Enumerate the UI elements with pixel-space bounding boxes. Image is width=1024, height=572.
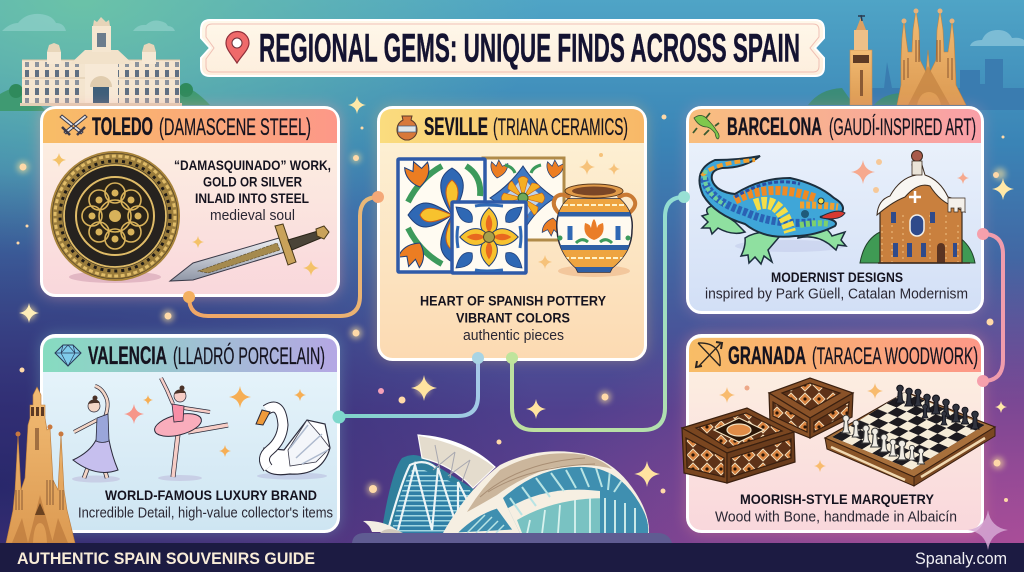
- illustration: ballerina in lilac: [72, 386, 120, 482]
- text: Toledo description: [174, 157, 331, 224]
- text: Toledo description: GOLD OR SILVER: [203, 174, 302, 190]
- illustration: white swan: [256, 407, 330, 480]
- connector: Valencia to Seville: [332, 352, 484, 424]
- text: Seville description: VIBRANT COLORS: [456, 310, 570, 326]
- heading: Seville: [424, 113, 628, 141]
- illustration: ceramic vase: [550, 184, 640, 277]
- text: Seville description: authentic pieces: [463, 328, 564, 344]
- icon: crossed swords: [60, 115, 87, 135]
- icon: bow and arrow: [696, 342, 722, 367]
- text: Toledo description: “DAMASQUINADO” WORK,: [174, 157, 331, 173]
- text: Toledo description: medieval soul: [210, 208, 295, 224]
- connector: Seville to Barcelona: [506, 191, 690, 430]
- illustration: trencadis salamander: [699, 156, 846, 264]
- heading: Seville: (TRIANA CERAMICS): [493, 114, 628, 141]
- text: Barcelona description: MODERNIST DESIGNS: [771, 269, 903, 285]
- text: Valencia description: Incredible Detail, high-value collector's items: [78, 506, 333, 522]
- illustration: small taracea box: [769, 378, 853, 438]
- footer bar: [0, 543, 1024, 572]
- text: Granada description: Wood with Bone, handmade in Albaicín: [715, 510, 957, 526]
- footer title: AUTHENTIC SPAIN SOUVENIRS GUIDE: [17, 549, 315, 568]
- heading: Barcelona: [727, 113, 976, 141]
- heading: Toledo: (DAMASCENE STEEL): [159, 114, 311, 141]
- panel: Seville: [377, 106, 647, 360]
- text: Valencia description: [78, 487, 333, 522]
- decorative sparkles: [52, 153, 319, 276]
- heading: Toledo: [92, 113, 311, 141]
- heading: Valencia: (LLADRÓ PORCELAIN): [173, 343, 325, 370]
- illustration: damascene shield: [51, 152, 179, 283]
- icon: location pin: [226, 32, 249, 63]
- landmark: City of Arts and Sciences: [352, 435, 672, 543]
- heading: Granada: [728, 342, 978, 370]
- text: Toledo description: INLAID INTO STEEL: [195, 190, 309, 206]
- decorative sparkles: [851, 159, 969, 193]
- illustration: ballerina in pink: [152, 378, 228, 481]
- icon: small gecko: [693, 113, 719, 139]
- text: Seville description: HEART OF SPANISH POTTERY: [420, 292, 607, 308]
- heading: Valencia: [88, 342, 325, 370]
- illustration: front tile: [452, 202, 526, 273]
- decorative sparkles: [124, 386, 306, 457]
- connector: Barcelona to Granada: [977, 228, 1003, 387]
- landmark: Giralda, Sagrada Familia and skyline: [808, 8, 1024, 110]
- text: Granada description: [715, 491, 957, 526]
- text: Barcelona description: [705, 269, 968, 302]
- heading: Toledo: TOLEDO: [92, 113, 153, 141]
- heading: Granada: GRANADA: [728, 342, 806, 370]
- illustration: sword: [170, 224, 329, 281]
- icon: amphora: [397, 116, 417, 140]
- icon: diamond: [55, 345, 81, 366]
- title banner: [201, 20, 824, 76]
- landmark: Cibeles palace with clouds: [0, 14, 210, 111]
- text: Seville description: [420, 292, 607, 344]
- panel: Toledo: [40, 106, 340, 297]
- heading: Barcelona: BARCELONA: [727, 113, 822, 141]
- illustration: Park Guell house: [860, 150, 975, 263]
- decorative sparkles: [719, 383, 883, 472]
- heading: Valencia: VALENCIA: [88, 342, 167, 370]
- text: Valencia description: WORLD-FAMOUS LUXURY BRAND: [105, 487, 317, 503]
- illustration: left tile: [396, 157, 485, 272]
- illustration: chess set: [825, 385, 995, 486]
- footer site name: Spanaly.com: [915, 549, 1007, 568]
- connector: Toledo to Seville: [183, 191, 384, 316]
- illustration: large taracea box: [682, 408, 795, 483]
- panel: Barcelona: [686, 106, 984, 314]
- panel: Valencia: [40, 334, 340, 533]
- landmark: Sagrada Familia bottom left: [6, 387, 75, 543]
- heading: Seville: SEVILLE: [424, 113, 488, 141]
- illustration: back right tile: [483, 158, 564, 240]
- sparkle: corner star: [968, 510, 1008, 550]
- panel: Granada: [682, 334, 995, 533]
- text: Granada description: MOORISH-STYLE MARQUETRY: [740, 491, 935, 507]
- sparkles and glowing dots: [16, 96, 1014, 502]
- text: Barcelona description: inspired by Park Güell, Catalan Modernism: [705, 286, 968, 302]
- decorative sparkles: [538, 153, 620, 269]
